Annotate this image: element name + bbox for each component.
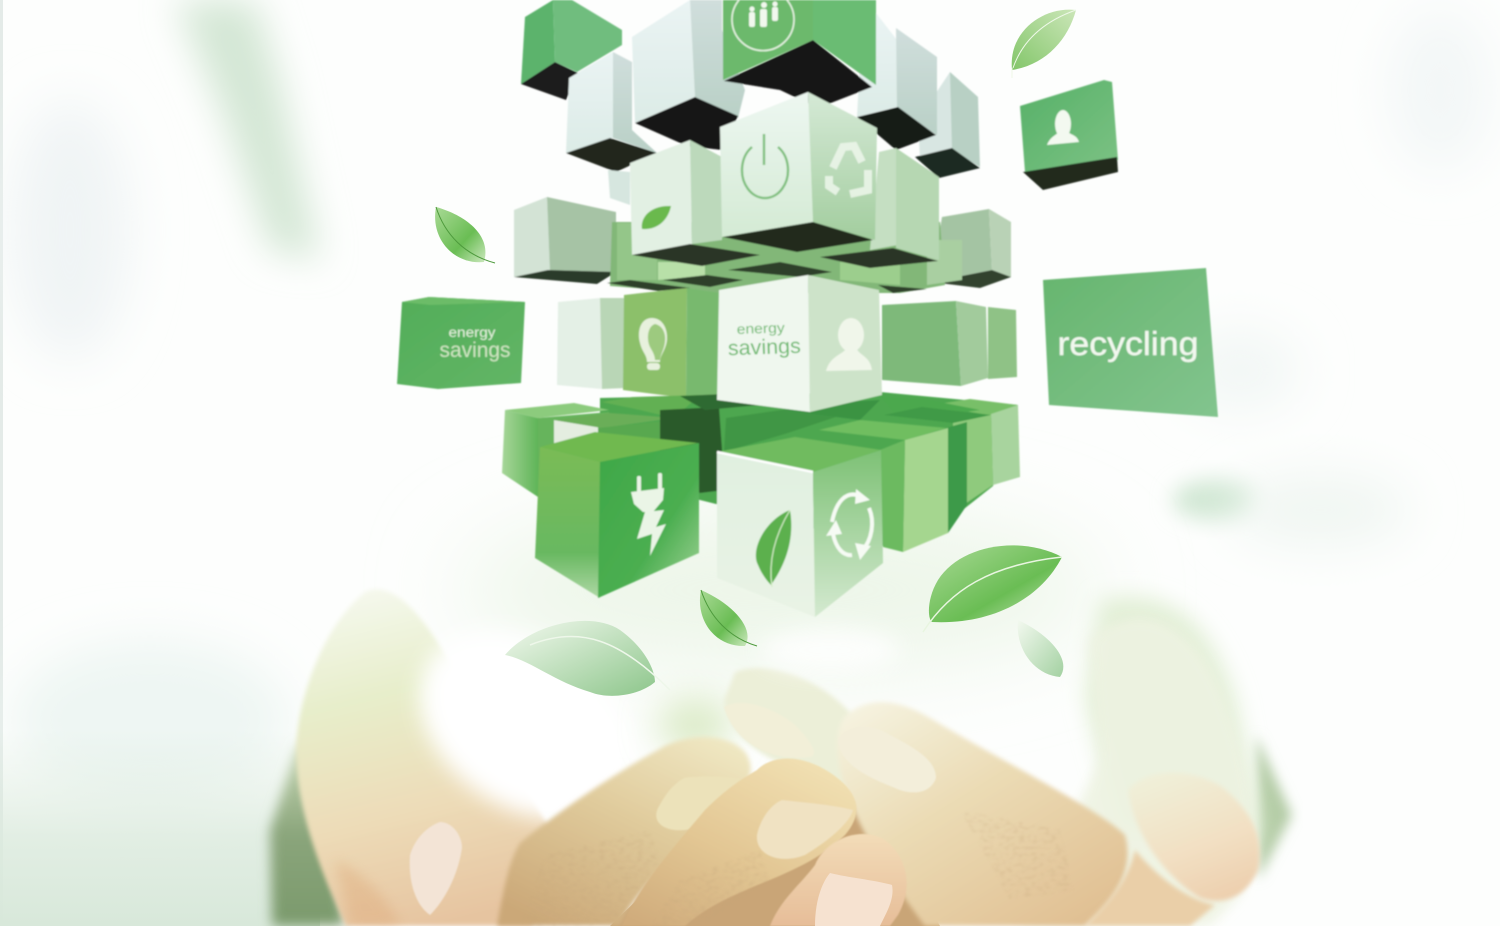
icon: circular arrows (826, 489, 872, 560)
label: energy savings tile (440, 324, 510, 362)
left index fingernail (656, 777, 750, 830)
skin texture right finger (960, 810, 1075, 900)
skin texture index (520, 830, 660, 926)
right hand back (1020, 618, 1253, 926)
icon: light bulb (639, 318, 667, 370)
bottom finger (770, 834, 907, 926)
cube: plug (535, 432, 699, 598)
hands (296, 589, 1260, 926)
skin base between fingers (610, 800, 940, 926)
cube cluster (397, 0, 1218, 617)
right sleeve pale (1085, 597, 1262, 840)
right big finger (837, 702, 1128, 926)
small cube behind leaf cube (608, 170, 630, 205)
icon: small leaf (642, 206, 671, 229)
label: energy savings: savings (727, 335, 801, 360)
cube: right of power cube (820, 148, 939, 268)
cube: bulb (623, 288, 720, 398)
cube: right sliver (988, 307, 1017, 379)
palm creases (335, 860, 400, 926)
right wrist base (1085, 850, 1215, 926)
leaf: left (435, 207, 495, 263)
right big fingernail (838, 727, 936, 792)
lower cubes green base (600, 392, 1018, 550)
left index finger (497, 737, 751, 926)
cube: centre energy savings (717, 275, 882, 412)
label: energy savings tile: energy (448, 324, 496, 340)
top finger (724, 668, 880, 800)
leaf: lower centre (700, 590, 757, 646)
right outer finger (1128, 773, 1260, 901)
icon: person on tile (1047, 110, 1079, 145)
cube: far right white (915, 72, 980, 178)
icon: person (826, 318, 872, 371)
left palm (296, 589, 570, 926)
label: energy savings tile: savings (440, 339, 510, 362)
floating tile: energy savings (397, 297, 525, 389)
icon: leaf on cube (756, 510, 791, 587)
leaf: big right (923, 545, 1062, 632)
leaf: top right (1012, 10, 1076, 78)
icon: recycle arrows (829, 146, 868, 194)
cube: left white (566, 52, 657, 172)
skin texture middle (650, 850, 770, 926)
icon: plug with lightning (631, 473, 666, 556)
icon: people in circle (732, 0, 794, 51)
middle finger (622, 759, 856, 926)
cube: top centre green with community badge (723, 0, 876, 108)
cube: muted right (931, 209, 1011, 288)
leaf: faint right (1018, 620, 1063, 677)
middle green lattice (607, 222, 962, 293)
floating tile: person (1020, 80, 1118, 190)
bottom fingernail (815, 873, 893, 926)
white glow over palm (384, 592, 666, 858)
icon: power button (742, 134, 788, 198)
leaf: lower pale (505, 621, 670, 696)
label: recycling: recycling (1058, 325, 1198, 362)
cube: power and recycle (720, 92, 877, 252)
cube: large white upper (632, 0, 745, 150)
lower back cubes right (724, 397, 1020, 552)
middle fingernail (757, 800, 853, 859)
cube: leaf and recycle (717, 437, 883, 617)
cube: top left green (521, 0, 622, 100)
label: energy savings: energy (736, 319, 785, 337)
cube: top right white (857, 13, 937, 150)
green halo behind fingers (657, 697, 733, 753)
cube: white behind bulb (557, 298, 626, 389)
floating tile: recycling (1043, 268, 1218, 417)
top fingernail (724, 703, 814, 758)
dark sleeve shadow right (1256, 735, 1292, 880)
cube: right green (882, 301, 988, 386)
white glow centre (760, 628, 900, 672)
cube: leaf face (630, 140, 760, 266)
thumb nail (410, 822, 462, 915)
lower back cubes left (502, 394, 760, 497)
dark sleeve shadow left (270, 745, 345, 926)
cube: muted left (514, 197, 616, 284)
label: energy savings (727, 319, 801, 360)
